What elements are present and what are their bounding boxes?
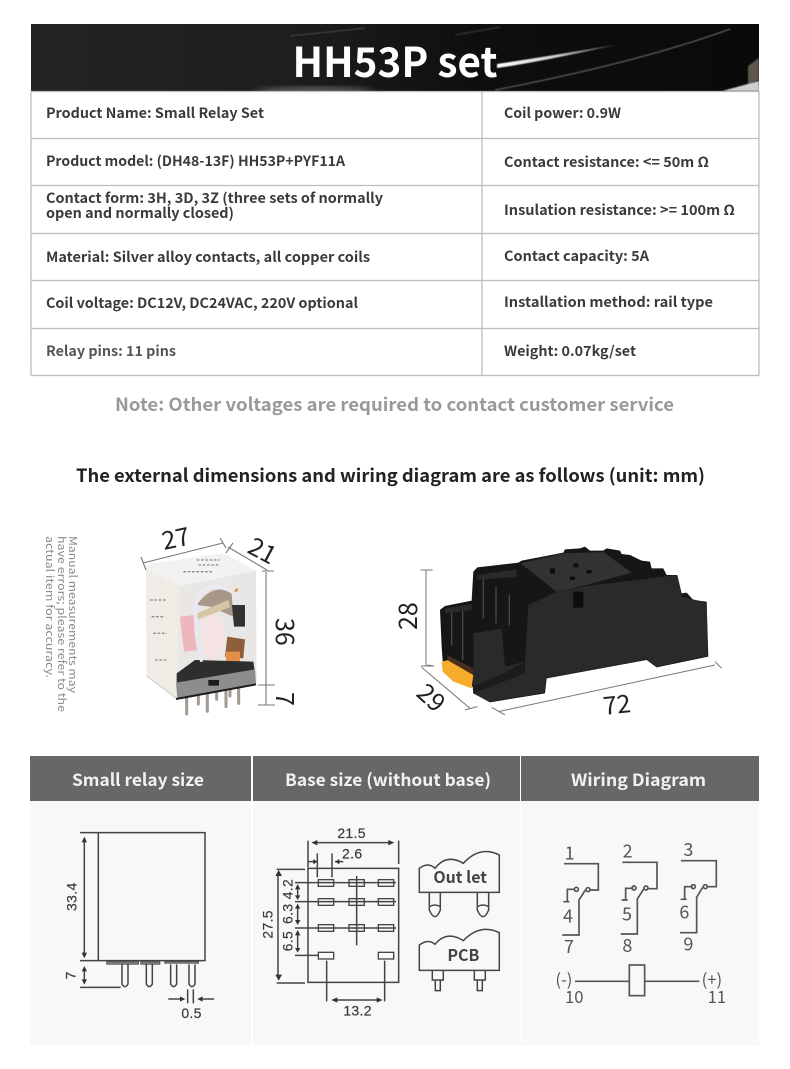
panel: wiring diagram: Wiring Diagram (571, 766, 706, 791)
wiring schematic: 11 (708, 984, 726, 1008)
base outline drawing: 4.2 (280, 879, 296, 899)
vertical disclaimer: have errors; please refer to the (54, 536, 70, 712)
left column specs: Contact form: 3H, 3D, 3Z (three sets of normally (46, 188, 383, 208)
base outline drawing: 6.3 (280, 904, 296, 924)
base outline drawing: 6.5 (280, 931, 296, 951)
wiring schematic: 3 (683, 836, 693, 862)
socket dimension labels: 72 (601, 684, 632, 723)
header banner (31, 24, 759, 91)
wiring schematic: 1 (565, 839, 575, 865)
relay photo with dimensions (141, 517, 304, 714)
wiring schematic: (+) (702, 967, 722, 991)
left column specs: open and normally closed) (46, 203, 234, 223)
relay dimension labels: 36 (268, 618, 304, 646)
left column specs: Product Name: Small Relay Set (46, 103, 264, 123)
base outline drawing: 2.6 (342, 845, 362, 861)
wiring schematic: 2 (623, 838, 633, 864)
panel: base size: Base size (without base) (285, 766, 491, 791)
right column specs: Weight: 0.07kg/set (504, 341, 636, 361)
base outline drawing: 13.2 (343, 1002, 372, 1018)
base outline drawing: 27.5 (260, 910, 276, 939)
socket photo with dimensions (389, 547, 722, 723)
panel: small relay size (30, 756, 251, 1045)
top print marks (150, 560, 220, 660)
base outline drawing: Out let (433, 864, 487, 888)
wiring schematic: 5 (622, 901, 632, 927)
right column specs: Coil power: 0.9W (504, 103, 621, 123)
wiring schematic: 8 (622, 932, 632, 958)
socket dimension labels (389, 602, 632, 723)
relay outline drawing (63, 833, 214, 1021)
panel: wiring diagram (521, 756, 759, 1045)
relay outline drawing: 0.5 (181, 1005, 202, 1021)
socket ribs (452, 578, 509, 660)
header (30, 756, 251, 801)
section heading: The external dimensions and wiring diagram are as follows (unit: mm) (76, 462, 705, 488)
title: HH53P set (292, 29, 498, 89)
left column specs: Coil voltage: DC12V, DC24VAC, 220V optional (46, 293, 359, 313)
panel: base size (253, 756, 520, 1045)
socket side face (473, 575, 708, 702)
panel: small relay size: Small relay size (72, 766, 204, 791)
wiring schematic: 6 (679, 899, 689, 925)
base outline drawing (260, 825, 499, 1018)
right column specs: Insulation resistance: >= 100m Ω (504, 200, 735, 220)
right column specs: Contact capacity: 5A (504, 246, 650, 266)
relay pins (187, 688, 239, 714)
wiring schematic: 7 (564, 933, 574, 959)
socket dimension labels: 29 (410, 674, 454, 720)
orange clip (442, 660, 473, 688)
white coil wire (195, 586, 236, 662)
relay dimension labels (158, 517, 304, 706)
socket dimension labels: 28 (389, 602, 425, 630)
header (253, 756, 520, 801)
relay outline drawing: 33.4 (64, 882, 80, 911)
wiring schematic (555, 836, 726, 1008)
header (521, 756, 759, 801)
relay outline drawing: 7 (63, 971, 79, 979)
socket top plate (521, 552, 632, 592)
vertical disclaimer: Manual measurements may (65, 536, 81, 693)
table grid (31, 91, 759, 376)
relay dimension lines (141, 538, 275, 705)
socket dimension lines (421, 570, 722, 715)
right column specs (504, 103, 735, 361)
relay dimension labels: 21 (242, 527, 284, 572)
note: Note: Other voltages are required to contact customer service (115, 391, 674, 417)
left column specs: Product model: (DH48-13F) HH53P+PYF11A (46, 151, 346, 171)
base outline drawing: PCB (447, 942, 479, 966)
wiring schematic: 10 (565, 984, 583, 1008)
left column specs (46, 103, 383, 361)
left column specs: Relay pins: 11 pins (46, 341, 176, 361)
vertical disclaimer: actual item for accuracy. (42, 536, 58, 678)
wiring schematic: 4 (563, 903, 573, 929)
vertical disclaimer (42, 536, 81, 712)
socket body (440, 547, 708, 702)
left column specs: Material: Silver alloy contacts, all copper coils (46, 247, 370, 267)
wiring schematic: (-) (555, 967, 572, 991)
relay dimension labels: 27 (158, 517, 193, 558)
relay dimension labels: 7 (268, 692, 304, 706)
specification table (31, 91, 759, 376)
right column specs: Contact resistance: <= 50m Ω (504, 152, 709, 172)
right column specs: Installation method: rail type (504, 292, 713, 312)
wiring schematic: 9 (683, 931, 693, 957)
relay body (146, 554, 257, 714)
base outline drawing: 21.5 (337, 825, 366, 841)
